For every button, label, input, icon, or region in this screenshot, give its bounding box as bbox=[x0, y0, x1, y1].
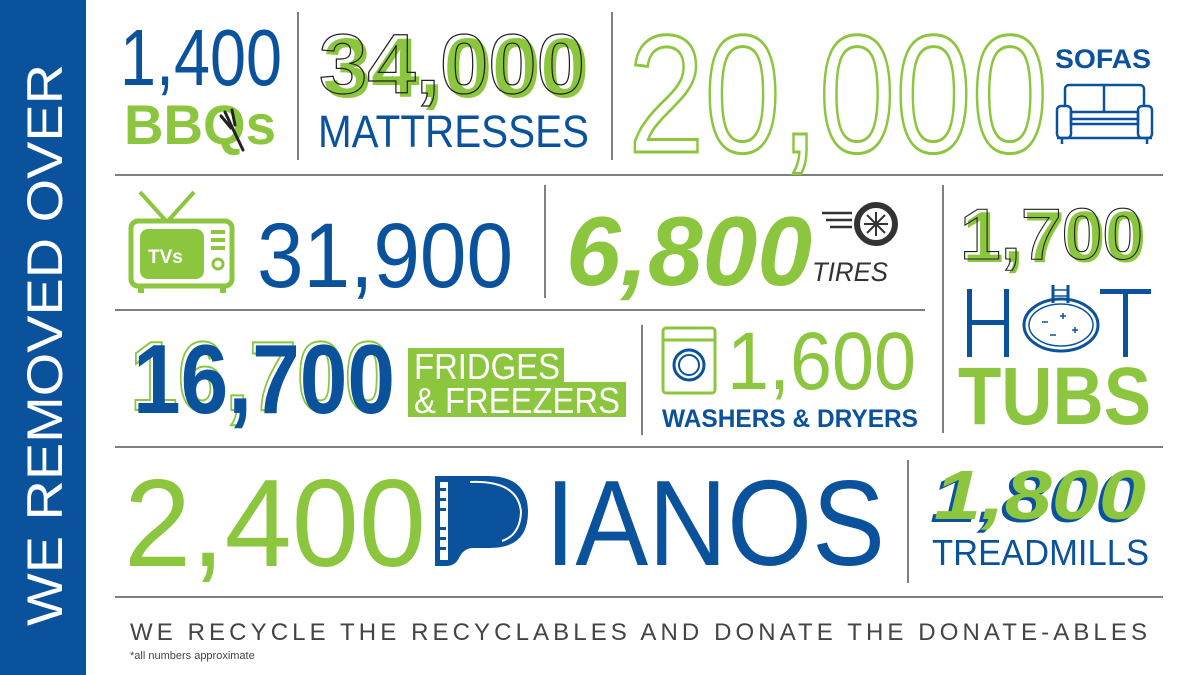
sidebar: we removed over: WE REMOVED OVER bbox=[17, 64, 73, 626]
stat: 34,000 mattresses: 34,000 bbox=[323, 21, 589, 115]
stat: 1,700 hot tubs: 1,700 bbox=[960, 195, 1143, 275]
stat: 6,800 tires: TIRES bbox=[812, 257, 888, 287]
stat: 1,600 washers bbox=[662, 316, 918, 433]
stat: 34,000 mattresses: MATTRESSES bbox=[318, 106, 589, 157]
sidebar: we removed over bbox=[0, 0, 86, 675]
stat: 16,700 fridges bbox=[130, 321, 626, 434]
stat: 20,000 sofas: 20,000 bbox=[628, 0, 1048, 188]
stat: 1,800 treadmills: 1,800 bbox=[934, 456, 1146, 534]
stat: 31,900 TVs bbox=[131, 192, 513, 307]
stat: 1,800 treadmills: TREADMILLS bbox=[932, 532, 1149, 573]
stat: 16,700 fridges: 16,700 bbox=[133, 324, 395, 434]
stat: 1,600 washers: WASHERS & DRYERS bbox=[662, 405, 918, 433]
icon: tv bbox=[131, 192, 232, 293]
stat: 2,400 pianos: IANOS bbox=[545, 455, 885, 591]
icon: tv: TVs bbox=[148, 247, 183, 268]
stat: 1,400 BBQs bbox=[120, 13, 282, 156]
label box: & FREEZERS bbox=[414, 380, 620, 421]
stat: 34,000 mattresses bbox=[318, 17, 589, 157]
label box: FRIDGES bbox=[414, 346, 560, 387]
stat: 34,000 mattresses: 34,000 bbox=[319, 17, 585, 111]
stat: 20,000 sofas: SOFAS bbox=[1055, 44, 1151, 74]
stat: 1,700 hot tubs bbox=[958, 195, 1151, 442]
stat: 6,800 tires: 6,800 bbox=[566, 196, 812, 306]
stat: 1,700 hot tubs: TUBS bbox=[958, 351, 1151, 442]
icon: piano P bbox=[435, 476, 528, 566]
stat: 1,700 hot tubs: 1,700 bbox=[963, 198, 1146, 278]
stat: 16,700 fridges: 16,700 bbox=[130, 321, 392, 431]
stat: 1,800 treadmills bbox=[930, 456, 1149, 573]
stat: 1,400 BBQs: BBQs bbox=[124, 93, 276, 156]
stat: 1,400 BBQs: 1,400 bbox=[120, 13, 282, 102]
icon: tub bbox=[1024, 285, 1098, 351]
icon: grill fork bbox=[221, 110, 243, 150]
stat: 2,400 pianos: 2,400 bbox=[124, 455, 426, 593]
footnote: *all numbers approximate bbox=[130, 650, 255, 662]
icon: sofa bbox=[1057, 85, 1152, 144]
stat: 1,600 washers: 1,600 bbox=[727, 316, 916, 407]
footer tagline: WE RECYCLE THE RECYCLABLES AND DONATE THE DONATE-ABLES bbox=[130, 619, 1147, 646]
label box bbox=[408, 346, 626, 421]
stat: 31,900 TVs: 31,900 bbox=[257, 205, 513, 307]
icon: tire bbox=[822, 205, 895, 243]
stat: 2,400 pianos bbox=[124, 455, 885, 593]
stat: 1,800 treadmills: 1,800 bbox=[930, 459, 1142, 537]
icon: washer bbox=[663, 328, 715, 393]
